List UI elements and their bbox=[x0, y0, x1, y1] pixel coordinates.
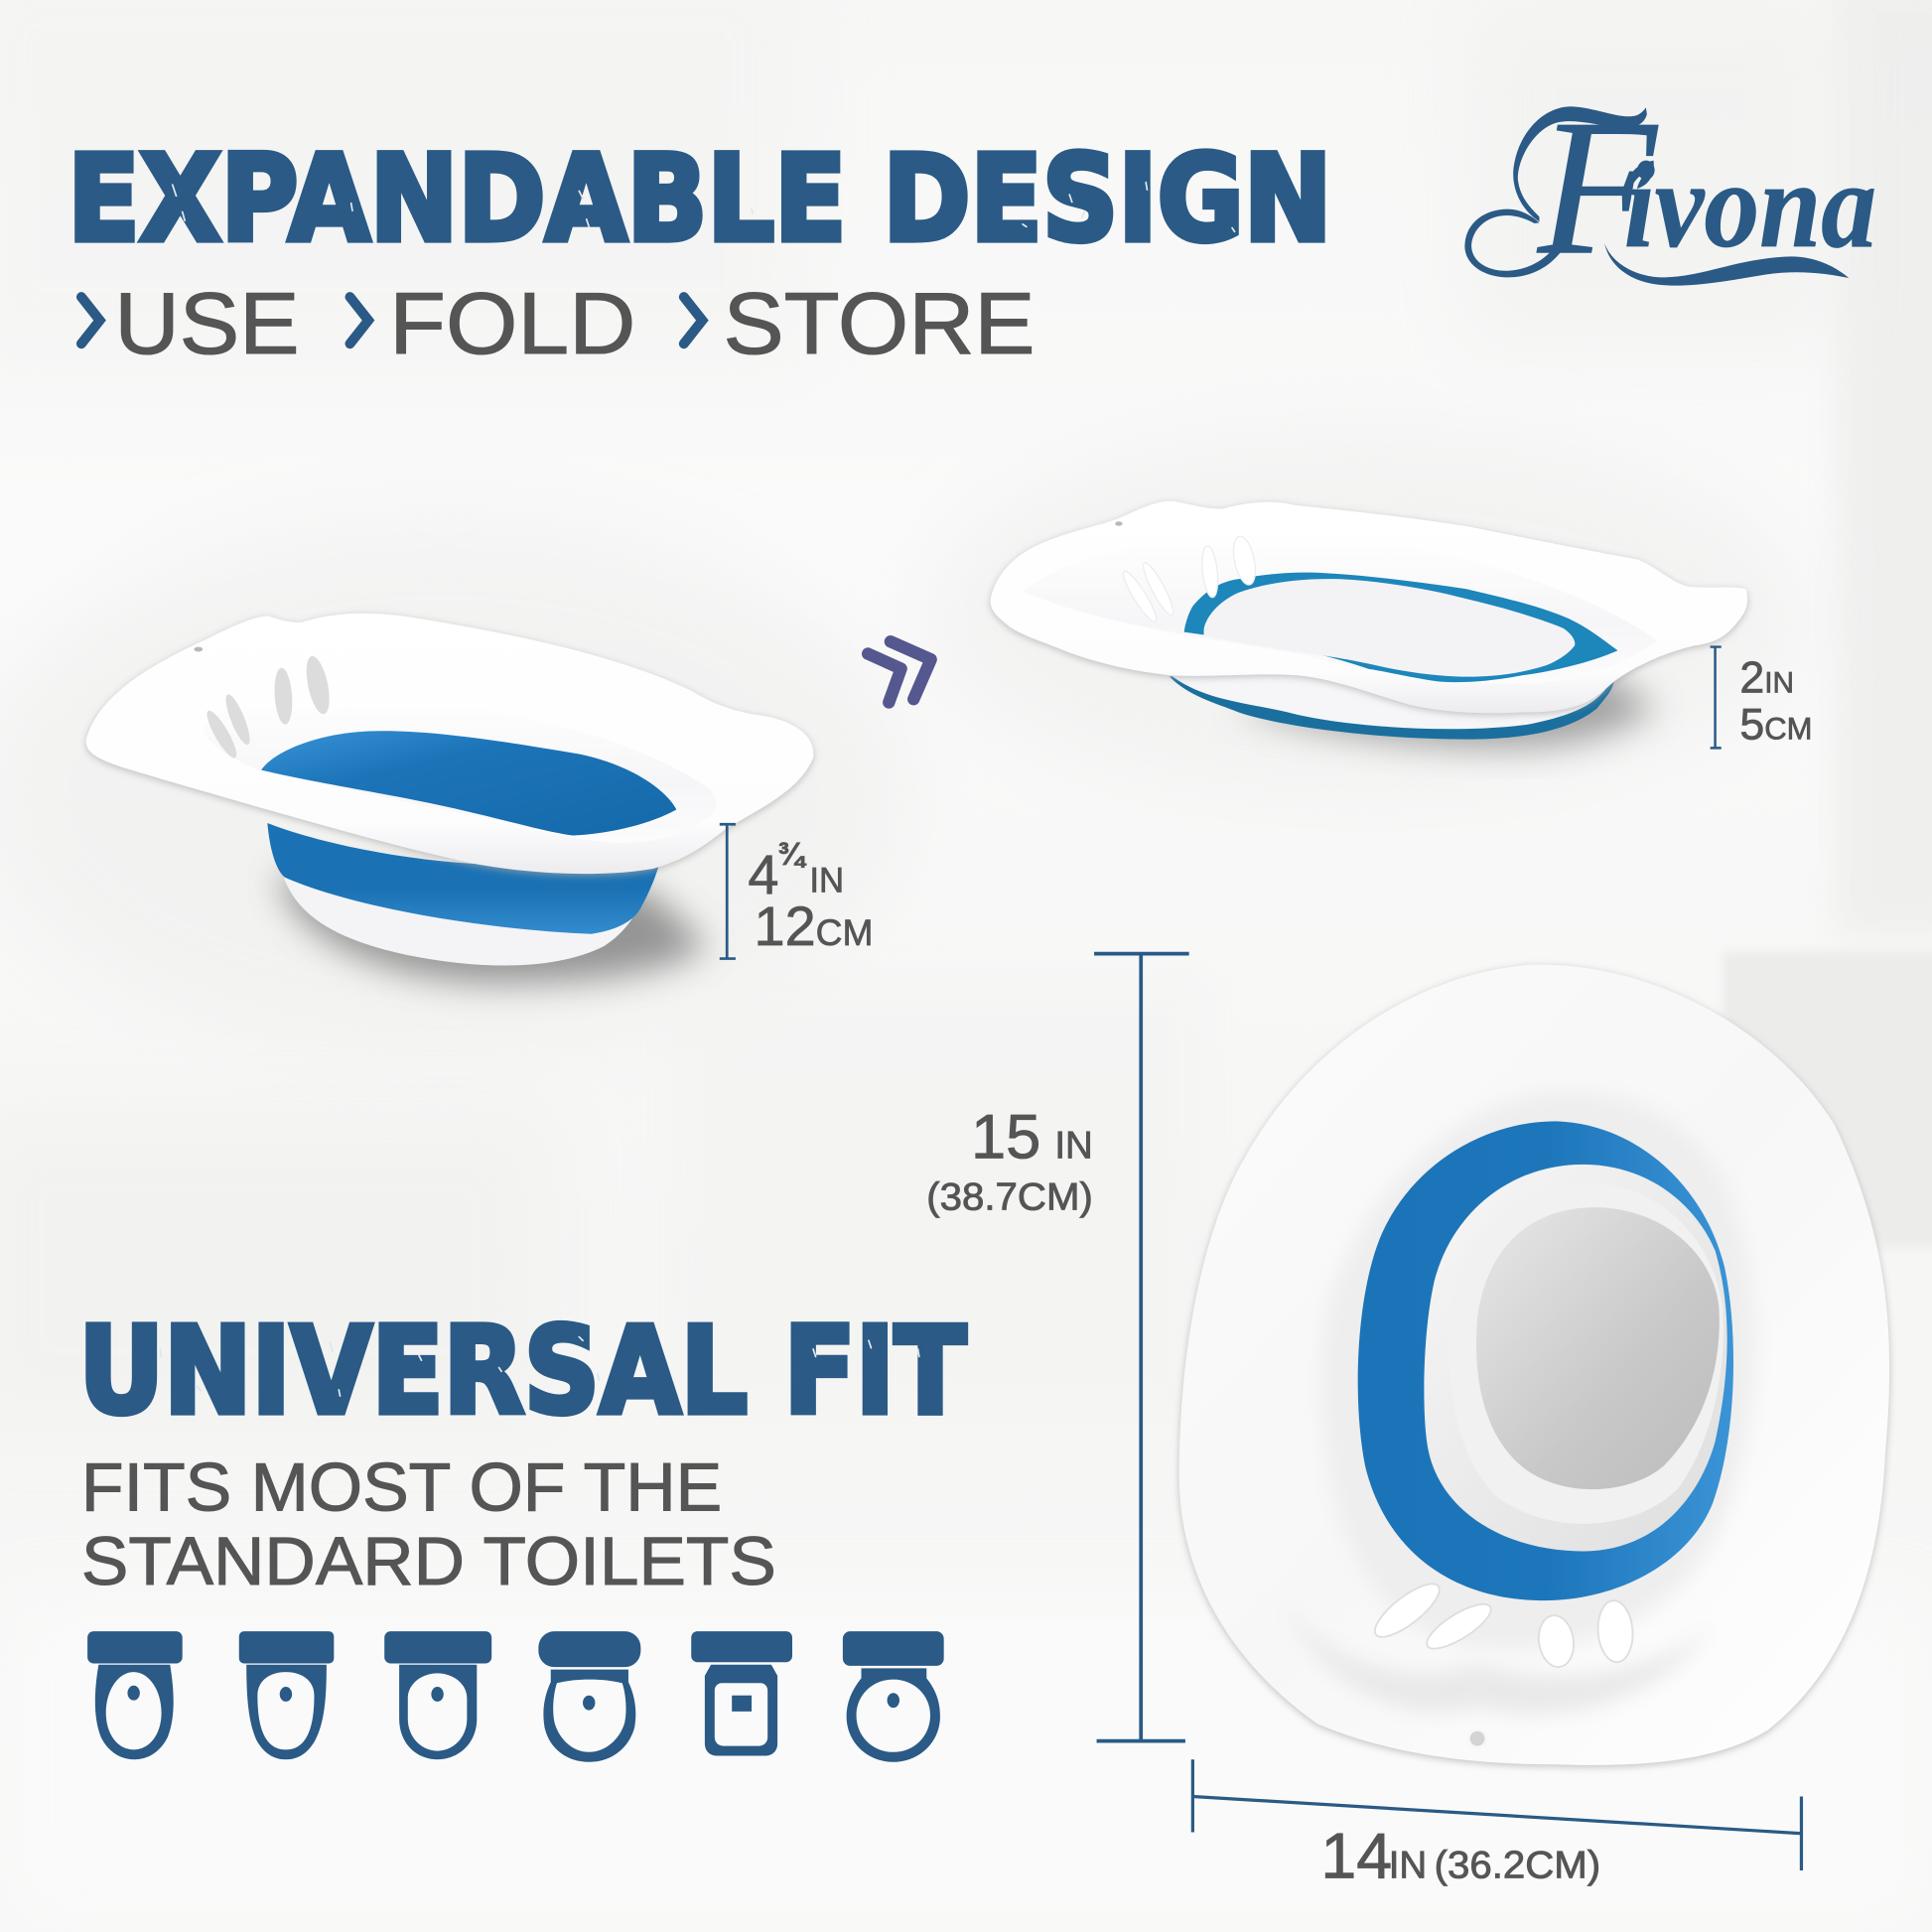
label: inches: ¾ bbox=[777, 836, 807, 872]
dimension: 14 in width bbox=[1192, 1759, 1801, 1891]
cast shadow bbox=[277, 875, 709, 983]
height bracket bbox=[1711, 647, 1722, 748]
label: inches: IN bbox=[809, 863, 844, 900]
lower body blue band bbox=[267, 823, 663, 934]
grey basin floor bbox=[1476, 1207, 1720, 1489]
icon: elongated toilet bbox=[87, 1631, 183, 1759]
icon: compact toilet bbox=[384, 1631, 491, 1759]
arrow: expand to fold bbox=[868, 641, 931, 703]
label: 15 in: 15 bbox=[971, 1103, 1040, 1173]
icon: square toilet bbox=[691, 1631, 792, 1756]
label: 15 in: IN bbox=[1054, 1125, 1093, 1168]
rim bbox=[991, 501, 1747, 713]
mounting hole bbox=[1468, 1729, 1486, 1747]
lower body white bbox=[278, 857, 653, 966]
width line bbox=[1192, 1759, 1801, 1870]
drain slots bbox=[1368, 1576, 1635, 1669]
label: 36.2 cm: (36.2CM) bbox=[1435, 1844, 1600, 1886]
icon: tapered toilet bbox=[239, 1631, 334, 1759]
label: 14 in: 14 bbox=[1320, 1820, 1392, 1891]
icon: chevron store bbox=[684, 297, 702, 344]
icon: chevron fold bbox=[349, 297, 368, 344]
label: 38.7 cm: (38.7CM) bbox=[926, 1176, 1093, 1219]
product photo: folded basin bbox=[991, 501, 1747, 748]
label: centimetres: CM bbox=[1764, 712, 1812, 747]
label: inches: 2 bbox=[1739, 653, 1764, 702]
inner basin blue bbox=[261, 731, 676, 835]
base white bbox=[1170, 674, 1614, 729]
mounting hole bbox=[1115, 521, 1123, 526]
line one: FITS MOST OF THE bbox=[81, 1450, 722, 1526]
dimension: 4 3/4 in 12 cm bbox=[720, 824, 873, 959]
product photo: expanded basin bbox=[86, 614, 813, 983]
inner white well bbox=[1204, 579, 1575, 677]
logo wordmark: ivona bbox=[1624, 136, 1876, 273]
inner basin white bbox=[204, 691, 717, 843]
blue collapsible ring bbox=[1358, 1121, 1733, 1600]
basin step bbox=[1449, 1182, 1724, 1524]
label: store: STORE bbox=[724, 274, 1035, 372]
inner depression shading bbox=[1321, 1090, 1755, 1650]
text block: fits most of the standard toilets bbox=[81, 1450, 776, 1599]
logo: fivona bbox=[1464, 79, 1876, 295]
label: centimetres: CM bbox=[816, 911, 873, 953]
label: inches: IN bbox=[1764, 666, 1794, 699]
mounting hole bbox=[194, 647, 203, 652]
lower rim shading bbox=[1282, 1601, 1713, 1714]
drain slots bbox=[203, 654, 334, 761]
logo wordmark: F bbox=[1536, 79, 1659, 295]
label: centimetres: 12 bbox=[755, 895, 816, 957]
height bracket bbox=[720, 824, 736, 959]
logo flourishes bbox=[1464, 106, 1849, 286]
label: fold: FOLD bbox=[389, 274, 635, 372]
heading: universal fit: UNIVERSAL FIT bbox=[78, 1302, 966, 1441]
line two: STANDARD TOILETS bbox=[81, 1524, 776, 1599]
product photo: top view bbox=[1179, 965, 1889, 1765]
label: 14 in: IN bbox=[1389, 1844, 1427, 1886]
base blue strip bbox=[1170, 676, 1614, 740]
label: use: USE bbox=[114, 274, 300, 372]
inner basin surface bbox=[1023, 530, 1657, 684]
icons: toilet shapes bbox=[87, 1631, 944, 1762]
icon: chevron use bbox=[81, 297, 100, 344]
icon: wide round toilet bbox=[538, 1631, 640, 1762]
label: centimetres: 5 bbox=[1739, 701, 1764, 750]
rim bbox=[86, 614, 813, 874]
blue ring bbox=[1184, 573, 1618, 682]
label: inches: 4 bbox=[748, 843, 778, 905]
dimension: 2 in 5 cm bbox=[1711, 647, 1812, 750]
cast shadow bbox=[1232, 671, 1657, 748]
title: expandable design: EXPANDABLE DESIGN bbox=[68, 130, 1332, 268]
height line bbox=[1094, 954, 1189, 1741]
drain slots bbox=[1119, 534, 1259, 624]
white inner bowl bbox=[1424, 1165, 1727, 1552]
dimension: 15 in height bbox=[926, 954, 1189, 1741]
outer rim bbox=[1179, 965, 1889, 1765]
subtitle: use fold store bbox=[81, 274, 1035, 372]
icon: circular toilet bbox=[843, 1631, 944, 1762]
